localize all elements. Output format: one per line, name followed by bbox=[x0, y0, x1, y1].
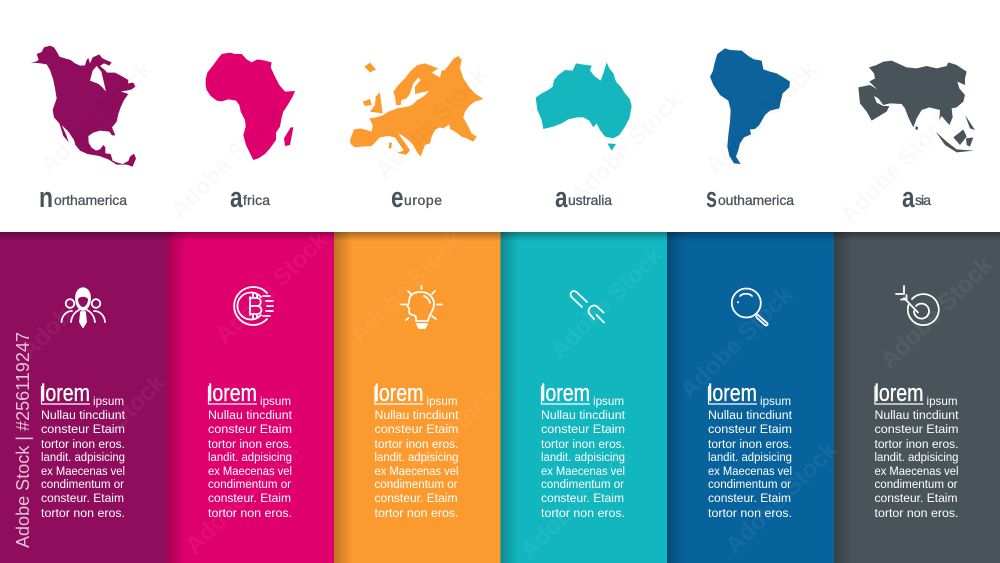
label: australia: a bbox=[555, 182, 568, 214]
text block: lorem bbox=[41, 380, 90, 407]
watermarks: Adobe Stock bbox=[675, 281, 798, 404]
label: northamerica: n bbox=[39, 182, 53, 214]
panel: Africa bbox=[168, 232, 334, 563]
text block bbox=[541, 380, 626, 520]
text block: ex Maecenas vel bbox=[708, 464, 792, 478]
text block: Nullau tincdiunt bbox=[874, 408, 959, 422]
label: europe: e bbox=[391, 182, 404, 214]
text block: Nullau tincdiunt bbox=[374, 408, 459, 422]
text block: tortor non eros. bbox=[874, 506, 958, 520]
text block: lorem bbox=[208, 380, 257, 407]
text block: ipsum bbox=[260, 394, 291, 408]
text block: condimentum or bbox=[208, 477, 291, 491]
text block: Nullau tincdiunt bbox=[41, 408, 126, 422]
text block: tortor non eros. bbox=[708, 506, 792, 520]
text block: ipsum bbox=[593, 394, 624, 408]
text block: ex Maecenas vel bbox=[874, 464, 958, 478]
text block: landit. adpisicing bbox=[708, 450, 792, 464]
icon: broken link bbox=[571, 291, 604, 322]
text block: consteur Etaim bbox=[374, 422, 458, 436]
text block: tortor non eros. bbox=[41, 506, 125, 520]
text block: lorem bbox=[708, 380, 757, 407]
icon: target bbox=[896, 286, 939, 325]
label: asia: a bbox=[902, 182, 915, 214]
text block: Nullau tincdiunt bbox=[541, 408, 626, 422]
text block: landit. adpisicing bbox=[208, 450, 292, 464]
label: southamerica: s bbox=[706, 182, 717, 214]
label: africa: a bbox=[230, 182, 243, 214]
text block: ipsum bbox=[926, 394, 958, 408]
label: asia: sia bbox=[915, 192, 931, 208]
text block: tortor inon eros. bbox=[874, 437, 958, 451]
map: South America bbox=[710, 48, 790, 164]
text block: lorem bbox=[541, 380, 590, 407]
watermarks: Adobe Stock bbox=[545, 241, 668, 364]
text block: tortor non eros. bbox=[374, 506, 458, 520]
icon: light bulb bbox=[401, 286, 442, 328]
text block: Nullau tincdiunt bbox=[208, 408, 293, 422]
text block: landit. adpisicing bbox=[41, 450, 125, 464]
watermarks: Adobe Stock bbox=[380, 381, 503, 504]
panel: Europe bbox=[334, 232, 501, 563]
text block: landit. adpisicing bbox=[541, 450, 625, 464]
panel: Australia bbox=[500, 232, 668, 563]
map: North America bbox=[31, 46, 136, 167]
text block: landit. adpisicing bbox=[374, 450, 459, 464]
watermarks: Adobe Stock bbox=[720, 436, 843, 559]
watermarks: Adobe Stock bbox=[875, 251, 998, 374]
text block: ex Maecenas vel bbox=[41, 464, 125, 478]
watermarks: Adobe Stock bbox=[210, 226, 333, 349]
text block: consteur Etaim bbox=[41, 422, 125, 436]
text block bbox=[208, 380, 293, 520]
panel: South America bbox=[667, 232, 834, 563]
label: northamerica: orthamerica bbox=[54, 192, 127, 208]
text block bbox=[41, 380, 126, 520]
text block: condimentum or bbox=[874, 477, 958, 491]
text block: condimentum or bbox=[41, 477, 124, 491]
panel: Asia bbox=[834, 232, 1000, 563]
text block bbox=[874, 380, 959, 520]
text block: consteur Etaim bbox=[541, 422, 625, 436]
text block: consteur. Etaim bbox=[374, 491, 458, 505]
text block: consteur Etaim bbox=[874, 422, 958, 436]
text block: lorem bbox=[874, 380, 924, 407]
icon: people bbox=[62, 288, 105, 327]
text block: consteur. Etaim bbox=[708, 491, 791, 505]
label: europe: urope bbox=[404, 192, 442, 208]
map: Australia bbox=[536, 62, 632, 151]
text block: ex Maecenas vel bbox=[208, 464, 292, 478]
text block bbox=[374, 380, 459, 520]
map: Asia bbox=[858, 61, 975, 152]
text block: tortor non eros. bbox=[541, 506, 625, 520]
panel: North America bbox=[0, 232, 168, 563]
text block: condimentum or bbox=[374, 477, 458, 491]
watermarks: Adobe bbox=[15, 292, 87, 364]
text block: tortor inon eros. bbox=[41, 437, 125, 451]
text block: condimentum or bbox=[541, 477, 624, 491]
text block: tortor inon eros. bbox=[708, 437, 792, 451]
text block: ex Maecenas vel bbox=[374, 464, 458, 478]
watermarks: Stock bbox=[105, 368, 171, 434]
label: southamerica: outhamerica bbox=[718, 192, 794, 208]
watermarks: Adobe Stock bbox=[180, 436, 303, 559]
text block: ipsum bbox=[760, 394, 791, 408]
text block: consteur Etaim bbox=[208, 422, 292, 436]
text block: tortor inon eros. bbox=[374, 437, 458, 451]
text block: landit. adpisicing bbox=[874, 450, 959, 464]
text block bbox=[708, 380, 793, 520]
watermarks: Adobe Stock bbox=[515, 441, 638, 563]
text block: consteur. Etaim bbox=[208, 491, 291, 505]
text block: tortor inon eros. bbox=[208, 437, 292, 451]
text block: consteur. Etaim bbox=[874, 491, 958, 505]
text block: consteur. Etaim bbox=[541, 491, 624, 505]
icon: magnifier bbox=[732, 288, 768, 325]
watermarks: Adobe Stock bbox=[345, 226, 468, 349]
text block: lorem bbox=[374, 380, 424, 407]
text block: tortor inon eros. bbox=[541, 437, 625, 451]
text block: condimentum or bbox=[708, 477, 791, 491]
label: africa: frica bbox=[243, 192, 270, 208]
label: australia: ustralia bbox=[568, 192, 612, 208]
vertical stock credit: Adobe Stock | #256119247 bbox=[13, 332, 33, 548]
text block: ipsum bbox=[426, 394, 458, 408]
icon: bitcoin bbox=[234, 287, 273, 325]
text block: tortor non eros. bbox=[208, 506, 292, 520]
text block: ex Maecenas vel bbox=[541, 464, 625, 478]
text block: consteur Etaim bbox=[708, 422, 792, 436]
map: Africa bbox=[206, 53, 295, 160]
text block: consteur. Etaim bbox=[41, 491, 124, 505]
map: Europe bbox=[350, 56, 483, 157]
text block: ipsum bbox=[93, 394, 124, 408]
text block: Nullau tincdiunt bbox=[708, 408, 793, 422]
